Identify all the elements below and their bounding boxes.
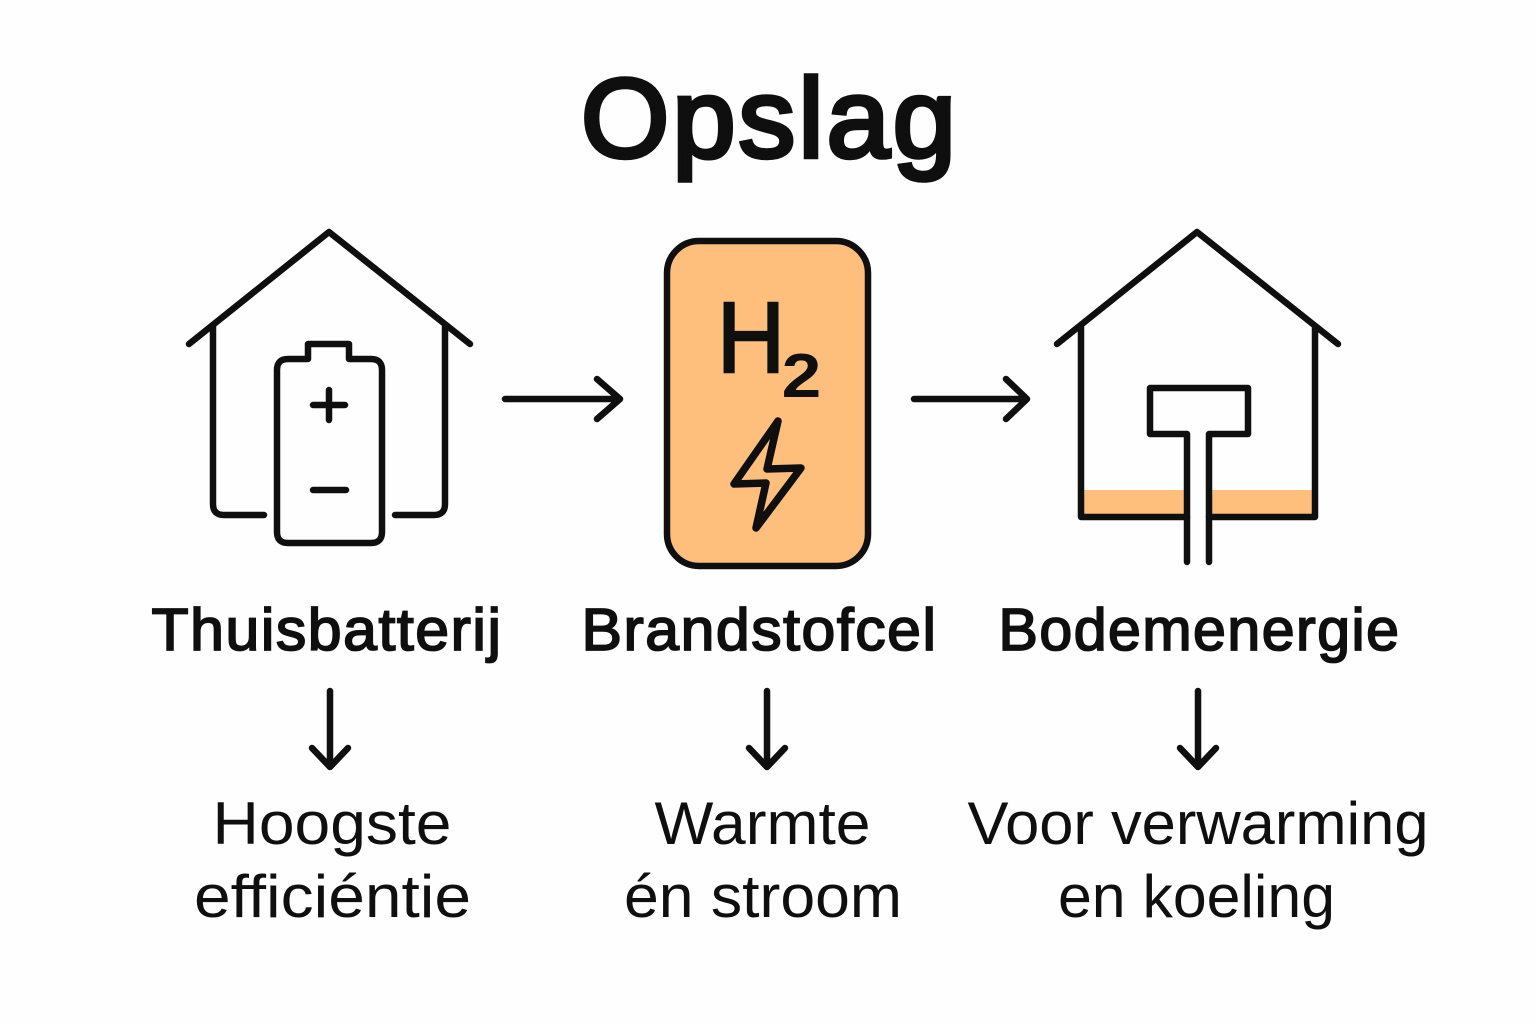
label: Brandstofcel: Brandstofcel [582, 597, 938, 663]
label: Bodemenergie: Bodemenergie [998, 597, 1400, 663]
icon: hydrogen fuel cell: 2 [782, 342, 821, 411]
icon: hydrogen fuel cell [667, 241, 868, 566]
icon: house with ground energy [1057, 232, 1338, 564]
text: Warmte en stroom [624, 790, 902, 930]
title: Opslag [581, 56, 959, 181]
icon: house with battery [189, 232, 470, 543]
arrow: down 3 [1180, 691, 1216, 767]
text: Voor verwarming en koeling [968, 790, 1428, 930]
text: Hoogste efficiëntie [194, 790, 471, 930]
text: Warmte en stroom: Warmte [654, 790, 870, 857]
text: Voor verwarming en koeling: en koeling [1058, 863, 1335, 930]
label: Thuisbatterij: Thuisbatterij [152, 597, 503, 663]
text: Voor verwarming en koeling: Voor verwarming [968, 790, 1428, 857]
text: Hoogste efficiëntie: efficiéntie [194, 863, 471, 930]
arrow: battery to fuel cell [505, 379, 620, 419]
text: Hoogste efficiëntie: Hoogste [212, 790, 452, 857]
arrow: down 2 [749, 691, 785, 767]
icon: hydrogen fuel cell: H [717, 282, 785, 394]
arrow: fuel cell to ground energy [914, 379, 1027, 419]
arrow: down 1 [312, 691, 348, 767]
text: Warmte en stroom: én stroom [624, 863, 902, 930]
